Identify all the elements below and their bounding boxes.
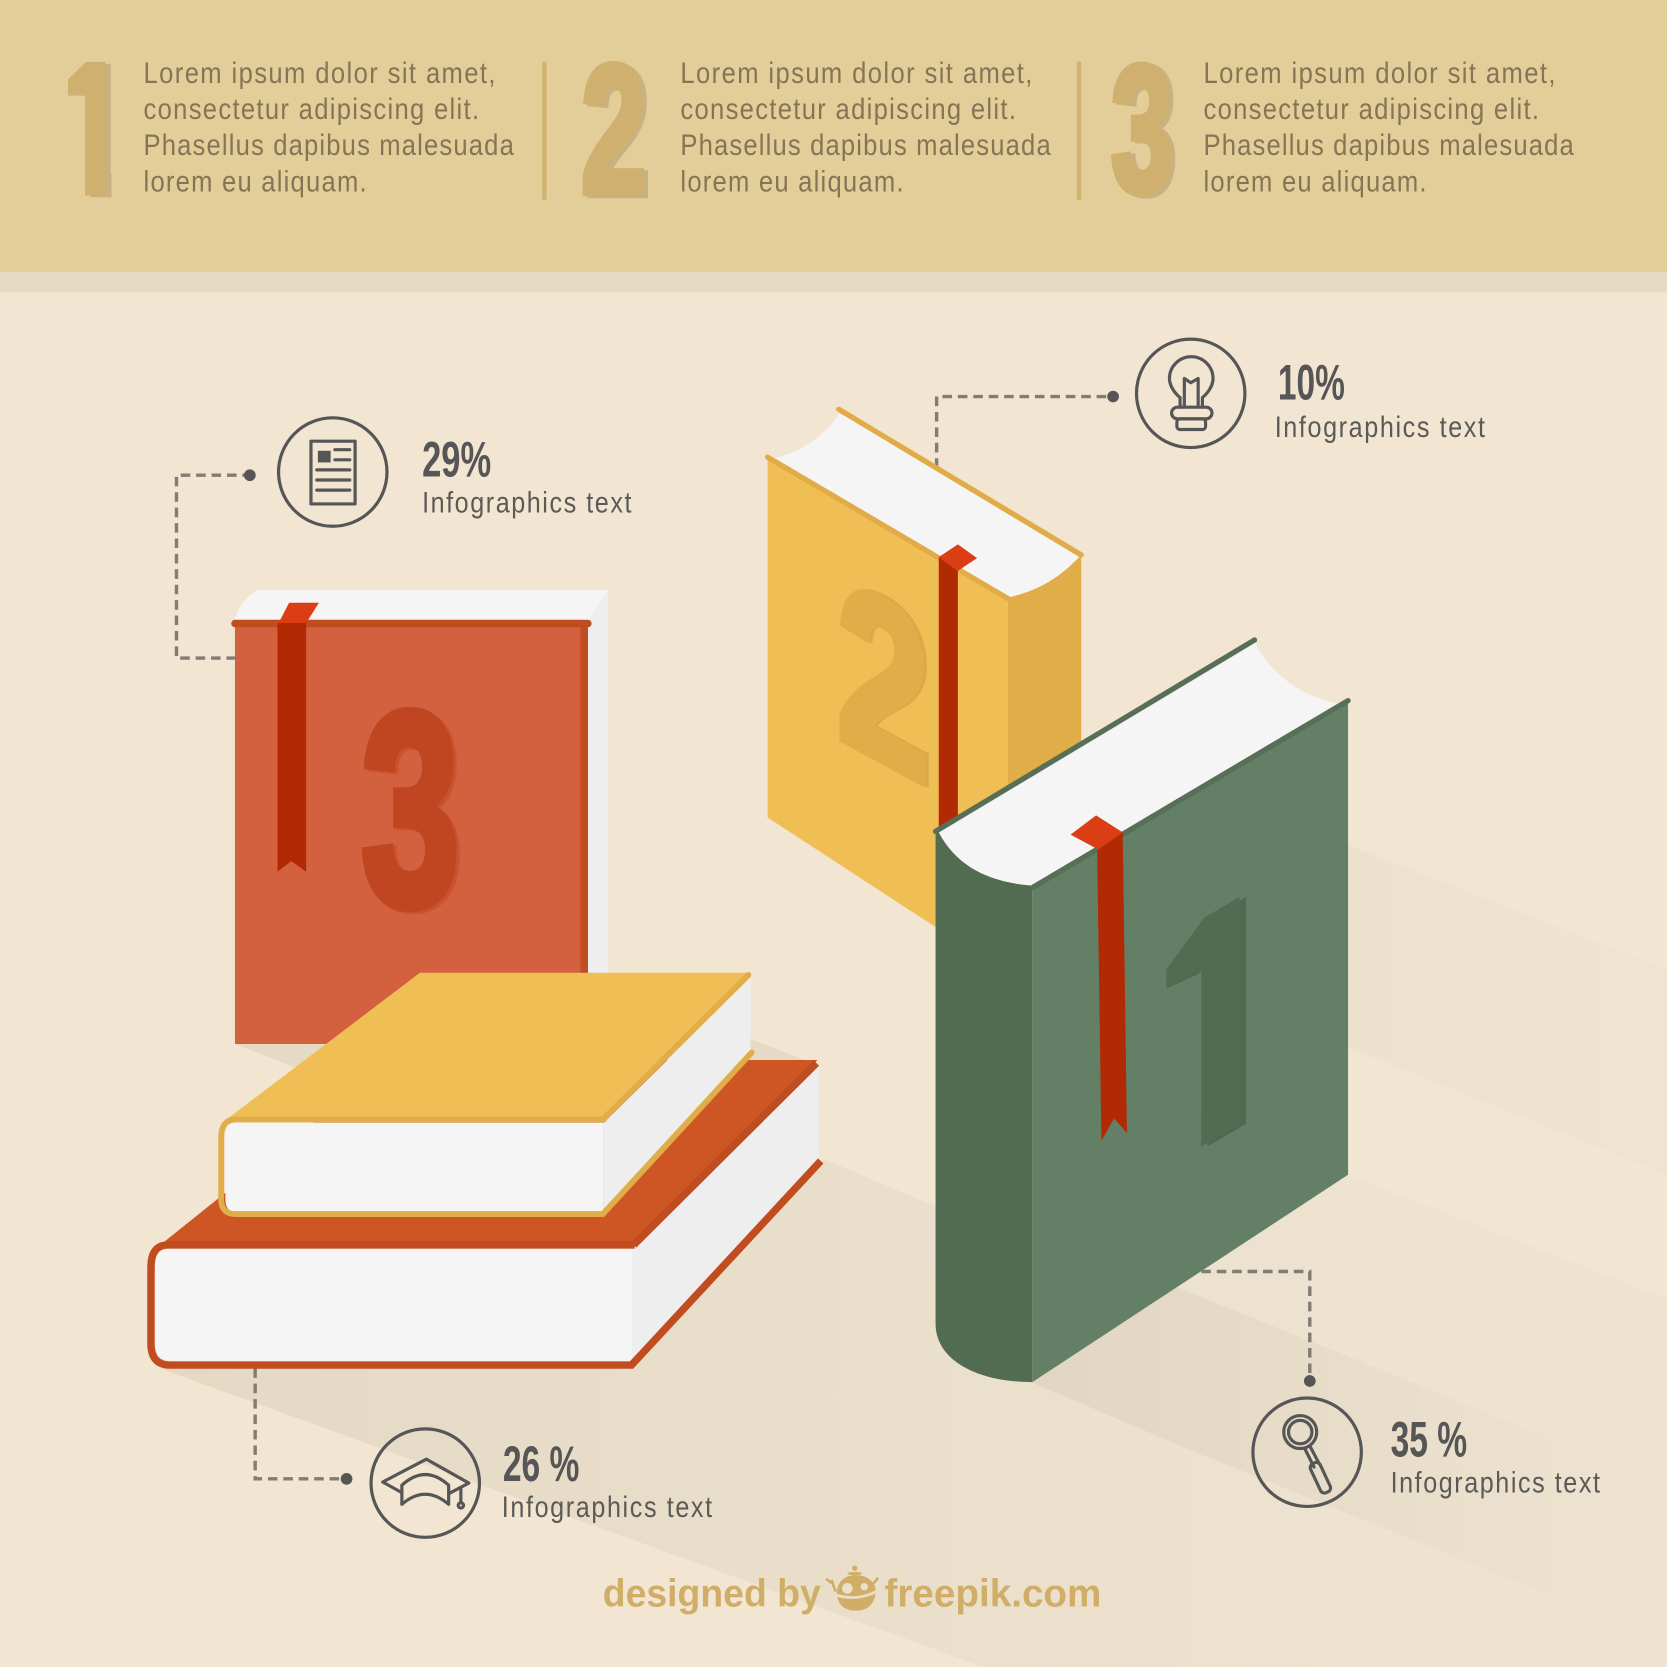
value: 35 %: [1391, 1411, 1467, 1467]
header band: [0, 0, 1667, 292]
label: Infographics text: [1275, 410, 1485, 443]
text block 2: lorem eu aliquam.: [680, 165, 903, 198]
value: 29%: [422, 431, 491, 487]
book 1 bookmark: [1071, 815, 1127, 1141]
lower book top cover: [162, 1060, 818, 1246]
footer credit: [603, 1565, 1101, 1615]
text block 1: [144, 56, 514, 198]
callout: 10%: [1107, 339, 1485, 448]
lower book outline: [151, 1063, 821, 1365]
text block 1: lorem eu aliquam.: [144, 165, 367, 198]
text block 2: consectetur adipiscing elit.: [680, 92, 1016, 126]
book 1 numeral: 1: [1147, 800, 1295, 1250]
value: 10%: [1278, 355, 1345, 411]
header item 2: [581, 27, 1051, 234]
stack: lower red book: [151, 1060, 821, 1365]
text block 3: [1203, 56, 1574, 198]
connector dot: [341, 1473, 352, 1485]
connector dot: [1304, 1375, 1316, 1387]
callout: 35%: [1253, 1375, 1600, 1506]
header item 1: [68, 62, 514, 198]
book 3 cover: [235, 621, 588, 1044]
label: Infographics text: [422, 486, 632, 519]
book 2 pages: [774, 412, 1079, 597]
value: 26 %: [503, 1436, 579, 1492]
text block 3: Phasellus dapibus malesuada: [1203, 128, 1574, 162]
book 1 numeral: 1: [1140, 800, 1289, 1250]
book 3: red standing: [234, 590, 608, 1044]
book 1 spine: [936, 831, 1032, 1382]
book 2 bookmark: [939, 544, 977, 851]
label: Infographics text: [502, 1490, 712, 1524]
book 3 numeral: 3: [365, 657, 463, 964]
upper book top cover: [226, 973, 751, 1119]
text block 2: Lorem ipsum dolor sit amet,: [680, 56, 1032, 89]
connector: book 3 to 29% callout: [176, 475, 250, 658]
book 2: yellow standing: [768, 409, 1081, 1021]
icon: newspaper: [279, 418, 387, 526]
numeral 1: [68, 62, 112, 198]
text block 3: Lorem ipsum dolor sit amet,: [1203, 56, 1555, 89]
numeral 1: 1: [62, 26, 132, 238]
callout: 26%: [341, 1429, 712, 1537]
book 1 numeral: [1166, 897, 1246, 1146]
text block 1: Phasellus dapibus malesuada: [144, 128, 514, 162]
book 2 edge lines: [768, 409, 1081, 599]
header item 3: [1111, 28, 1574, 232]
text block 3: lorem eu aliquam.: [1203, 165, 1427, 198]
book 2 spine side: [1008, 556, 1081, 893]
footer credit: designed by: [603, 1571, 821, 1615]
numeral 3: 3: [1115, 29, 1177, 232]
icon: robot logo: [826, 1565, 878, 1611]
numeral 2: 2: [585, 29, 650, 234]
book 1 edge lines: [936, 640, 1348, 888]
book 3 numeral: 3: [361, 655, 460, 962]
numeral 3: 3: [1111, 28, 1173, 230]
book 2 numeral: 2: [840, 527, 932, 835]
lower book pages: [155, 1249, 632, 1361]
book 3 pages: [234, 590, 608, 621]
book 2 numeral: 2: [837, 527, 929, 835]
text block 1: consectetur adipiscing elit.: [144, 92, 479, 126]
book 1: green standing: [936, 640, 1348, 1382]
label: Infographics text: [1391, 1466, 1600, 1499]
connector dot: [244, 469, 256, 481]
icon: magnifying glass: [1253, 1398, 1361, 1506]
footer credit: freepik.com: [885, 1571, 1101, 1615]
icon: graduation cap: [371, 1429, 479, 1537]
floor shadows: [159, 845, 1667, 1667]
connector: book 2 to 10% callout: [937, 397, 1113, 468]
numeral 1: 1: [56, 25, 127, 236]
book 3 bookmark: [277, 603, 319, 872]
icon: light bulb: [1136, 339, 1245, 448]
upper book outline: [221, 975, 752, 1214]
text block 3: consectetur adipiscing elit.: [1203, 92, 1539, 126]
callout: 29%: [244, 418, 632, 526]
book 1 pages: [939, 641, 1337, 886]
numeral 2: 2: [581, 27, 646, 232]
stack: upper yellow book: [221, 973, 752, 1214]
text block 2: Phasellus dapibus malesuada: [680, 128, 1051, 162]
book 1 cover: [1032, 702, 1348, 1382]
connector dot: [1107, 391, 1119, 402]
connector: stack to 26% callout: [255, 1368, 347, 1479]
book 2 cover: [768, 459, 1008, 1021]
text block 1: Lorem ipsum dolor sit amet,: [144, 56, 496, 89]
connector: book 1 to 35% callout: [1201, 1272, 1310, 1374]
text block 2: [680, 56, 1051, 198]
upper book pages: [225, 1123, 604, 1212]
